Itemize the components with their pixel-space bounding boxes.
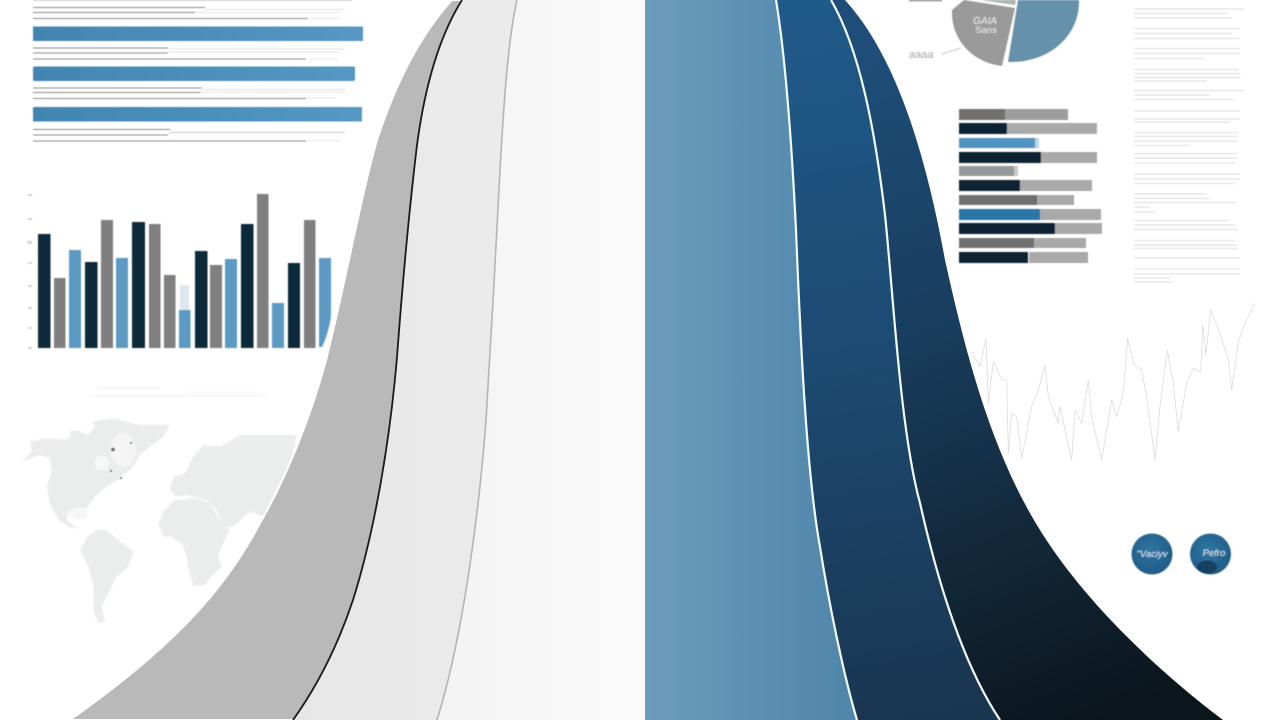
right text column	[1134, 9, 1244, 282]
map heading lines	[92, 388, 267, 396]
pie label: Sans	[975, 25, 997, 36]
icon: blue badge right	[1190, 534, 1231, 574]
text block 2	[33, 48, 345, 59]
world map	[22, 388, 297, 623]
text block 4	[33, 130, 345, 141]
left curve: light gray band	[293, 0, 645, 720]
right curve: middle blue band	[776, 0, 1000, 720]
map markers	[110, 442, 132, 479]
badge label: Pefro	[1203, 548, 1225, 559]
left curve: gray line	[437, 0, 517, 720]
badge label: "Vaciyv	[1136, 549, 1169, 560]
bar chart	[27, 194, 331, 349]
y axis ticks	[27, 194, 32, 349]
gray bars	[54, 194, 316, 348]
text block 1	[33, 8, 345, 18]
callout: upper	[909, 0, 942, 2]
left curve: black line	[293, 0, 462, 720]
stacked horizontal bars	[959, 109, 1102, 263]
dark bars	[38, 222, 300, 348]
pie label: GAIA	[973, 16, 997, 27]
top rule	[33, 0, 352, 2]
text block 3	[33, 88, 345, 98]
blue bar 3	[33, 107, 362, 122]
badge shadow	[1197, 560, 1217, 574]
blue bars	[69, 250, 331, 348]
pie chart	[909, 0, 1079, 66]
left curve: pale band	[437, 0, 645, 720]
gray slice	[952, 0, 1015, 66]
right curve: white lines	[776, 0, 1000, 720]
blue bar 2	[33, 66, 355, 81]
annotation on short bar	[180, 285, 189, 310]
callout: lower	[909, 48, 961, 61]
gray segments	[959, 109, 1037, 248]
icon: blue badge left	[1132, 534, 1172, 574]
blue slice	[1008, 0, 1079, 62]
line chart	[972, 303, 1255, 460]
callout: lower: aaaa	[909, 49, 934, 61]
right curve: dark outer band	[800, 0, 1223, 720]
blue segments	[959, 138, 1040, 220]
left curve: outer gray band	[70, 0, 645, 720]
blue bar 1	[33, 26, 363, 41]
small slice	[980, 0, 1016, 5]
light segments	[1005, 109, 1102, 263]
continents	[22, 418, 297, 623]
dark segments	[959, 123, 1055, 263]
panel: top-left text and blue bars	[33, 0, 363, 141]
right curve: light blue band	[645, 0, 857, 720]
